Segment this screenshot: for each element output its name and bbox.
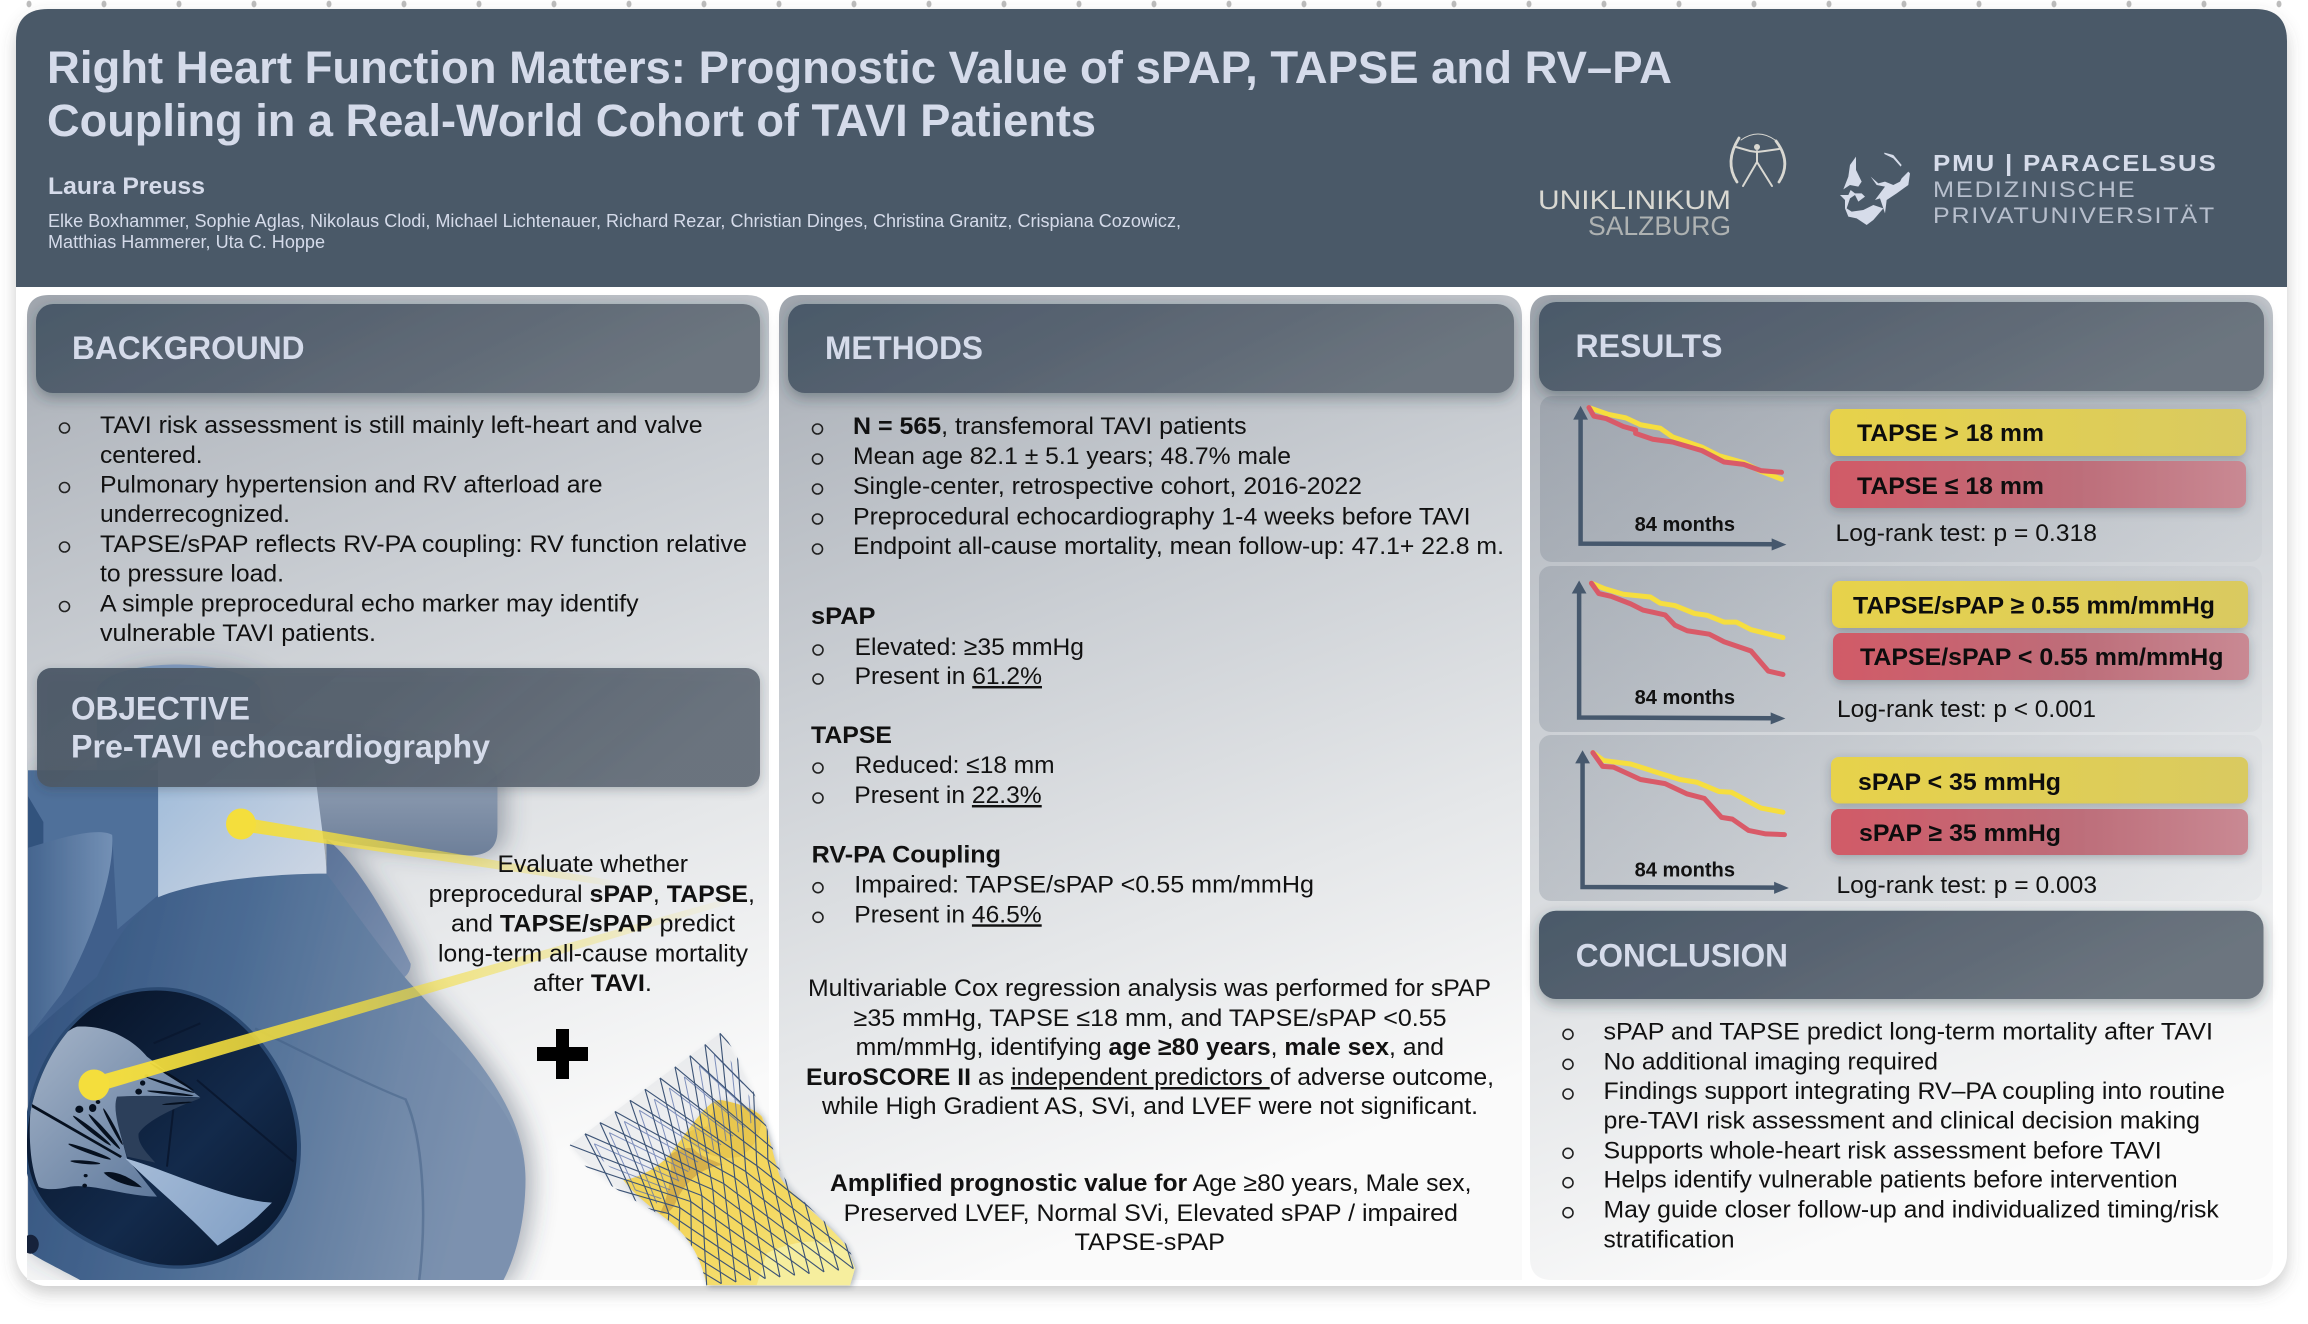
conclusion bullet list: No additional imaging required	[1604, 1048, 1938, 1075]
panel: methods	[779, 295, 1522, 1280]
TAPSE definition	[811, 722, 1055, 809]
legend: sPAP below 35	[1831, 757, 2248, 804]
amplified prognostic value paragraph: Amplified prognostic value for Age ≥80 years, Male sex,	[830, 1170, 1472, 1197]
logo: PMU Paracelsus	[1840, 150, 2218, 228]
panel: results	[1530, 295, 2273, 1280]
axis label: 84 months	[1635, 687, 1735, 709]
background bullet list: to pressure load.	[100, 561, 284, 588]
background bullet list: TAPSE/sPAP reflects RV-PA coupling: RV function relative	[100, 531, 747, 558]
background heading bar: BACKGROUND	[72, 330, 304, 366]
sPAP definition: Elevated: ≥35 mmHg	[855, 634, 1084, 661]
survival chart: TAPSE	[1573, 406, 1786, 550]
legend: TAPSE up to 18	[1830, 461, 2246, 508]
study design list: Preprocedural echocardiography 1-4 weeks before TAVI	[853, 503, 1470, 530]
background bullet list: TAVI risk assessment is still mainly left-heart and valve	[100, 412, 703, 439]
decorative top dots	[0, 0, 2308, 8]
co-authors	[48, 211, 1181, 252]
log-rank result: Log-rank test: p = 0.318	[1836, 520, 2097, 547]
objective heading bar: Pre-TAVI echocardiography	[71, 728, 490, 764]
log-rank result: Log-rank test: p < 0.001	[1837, 696, 2096, 723]
logo: PMU Paracelsus: MEDIZINISCHE	[1933, 177, 2136, 202]
conclusion bullet list	[1563, 1018, 2225, 1254]
TAPSE definition: Present in 22.3%	[854, 782, 1042, 809]
objective heading bar: OBJECTIVE	[71, 691, 250, 727]
legend: sPAP 35 or above: sPAP ≥ 35 mmHg	[1859, 820, 2061, 847]
study design list: Mean age 82.1 ± 5.1 years; 48.7% male	[853, 443, 1291, 470]
title: Right Heart Function Matters: Prognostic Value of sPAP, TAPSE and RV–PA	[47, 42, 1672, 93]
legend: ratio below threshold	[1833, 633, 2249, 680]
heart valve opening	[24, 987, 301, 1269]
background heading bar	[36, 304, 760, 393]
logo: Uniklinikum Salzburg	[1538, 134, 1785, 241]
pointer line to pulmonary artery	[241, 817, 610, 886]
title: Coupling in a Real-World Cohort of TAVI Patients	[47, 95, 1096, 146]
background bullet list: underrecognized.	[100, 501, 290, 528]
methods heading bar	[788, 304, 1514, 393]
RV-PA coupling definition	[812, 842, 1314, 928]
legend: TAPSE above 18: TAPSE > 18 mm	[1857, 420, 2044, 447]
logo: Uniklinikum Salzburg: SALZBURG	[1588, 211, 1731, 241]
amplified prognostic value paragraph: TAPSE-sPAP	[1074, 1229, 1225, 1256]
axis label: 84 months	[1635, 860, 1735, 882]
conclusion bullet list: stratification	[1604, 1227, 1734, 1254]
conclusion bullet list: Supports whole-heart risk assessment before TAVI	[1604, 1137, 2162, 1164]
legend: sPAP 35 or above	[1831, 809, 2248, 855]
conclusion bullet list: pre-TAVI risk assessment and clinical decision making	[1604, 1107, 2200, 1134]
conclusion bullet list: May guide closer follow-up and individualized timing/risk	[1604, 1197, 2220, 1224]
TAPSE definition: Reduced: ≤18 mm	[855, 752, 1055, 779]
objective heading bar	[37, 668, 760, 787]
results heading bar: RESULTS	[1576, 328, 1722, 364]
Cox regression paragraph: EuroSCORE II as independent predictors of adverse outcome,	[806, 1064, 1494, 1091]
amplified prognostic value paragraph: Preserved LVEF, Normal SVi, Elevated sPAP / impaired	[844, 1200, 1458, 1227]
marker: pulmonary artery	[226, 808, 256, 840]
results heading bar	[1539, 302, 2264, 391]
sPAP definition: Present in 61.2%	[855, 663, 1042, 690]
Cox regression paragraph: mm/mmHg, identifying age ≥80 years, male sex, and	[856, 1034, 1444, 1061]
background bullet list: Pulmonary hypertension and RV afterload are	[100, 472, 603, 499]
conclusion heading bar: CONCLUSION	[1576, 938, 1788, 974]
study design list	[812, 413, 1504, 560]
methods heading bar: METHODS	[825, 330, 983, 366]
survival chart: TAPSE/sPAP	[1572, 580, 1785, 724]
legend: sPAP below 35: sPAP < 35 mmHg	[1858, 769, 2061, 796]
sPAP definition	[811, 603, 1084, 690]
RV-PA coupling definition: RV-PA Coupling	[812, 842, 1001, 869]
legend: ratio above threshold: TAPSE/sPAP ≥ 0.55 mm/mmHg	[1853, 592, 2215, 620]
objective statement: long-term all-cause mortality	[438, 941, 749, 968]
presenting author: Laura Preuss	[48, 173, 205, 200]
background bullet list	[60, 412, 747, 647]
pointer line to valve	[94, 899, 725, 1093]
objective statement: preprocedural sPAP, TAPSE,	[429, 881, 755, 908]
Cox regression paragraph: while High Gradient AS, SVi, and LVEF were not significant.	[821, 1093, 1478, 1120]
title	[47, 42, 1672, 146]
co-authors: Elke Boxhammer, Sophie Aglas, Nikolaus Clodi, Michael Lichtenauer, Richard Rezar, Christian Dinges, Christina Granitz, Crispiana Cozowicz,	[48, 211, 1181, 231]
objective statement	[429, 851, 755, 997]
panel: background and objective	[22, 295, 769, 1286]
Cox regression paragraph: Multivariable Cox regression analysis was performed for sPAP	[808, 975, 1491, 1002]
study design list: N = 565, transfemoral TAVI patients	[853, 413, 1247, 440]
result row: TAPSE	[1540, 396, 2262, 562]
objective statement: Evaluate whether	[498, 851, 688, 878]
co-authors: Matthias Hammerer, Uta C. Hoppe	[48, 232, 325, 252]
axis label: 84 months	[1635, 514, 1735, 536]
study design list: Single-center, retrospective cohort, 2016-2022	[853, 473, 1362, 500]
logo: PMU Paracelsus: PMU | PARACELSUS	[1933, 150, 2218, 176]
amplified prognostic value paragraph	[830, 1170, 1472, 1256]
header band	[16, 9, 2287, 287]
legend: ratio below threshold: TAPSE/sPAP < 0.55 mm/mmHg	[1860, 644, 2224, 671]
TAPSE definition: TAPSE	[811, 722, 892, 749]
Cox regression paragraph: ≥35 mmHg, TAPSE ≤18 mm, and TAPSE/sPAP <0.55	[854, 1005, 1447, 1032]
heart illustration	[22, 665, 725, 1286]
sPAP definition: sPAP	[811, 603, 876, 630]
background bullet list: A simple preprocedural echo marker may identify	[100, 591, 639, 618]
RV-PA coupling definition: Present in 46.5%	[854, 901, 1042, 928]
legend: TAPSE above 18	[1830, 409, 2246, 456]
conclusion heading bar	[1539, 911, 2264, 999]
study design list: Endpoint all-cause mortality, mean follow-up: 47.1+ 22.8 m.	[853, 533, 1504, 560]
logo: Uniklinikum Salzburg: UNIKLINIKUM	[1538, 185, 1731, 215]
survival chart: sPAP	[1575, 750, 1789, 894]
logo: PMU Paracelsus: PRIVATUNIVERSITÄT	[1933, 203, 2216, 228]
objective statement: after TAVI.	[533, 970, 652, 997]
conclusion bullet list: sPAP and TAPSE predict long-term mortality after TAVI	[1604, 1018, 2213, 1045]
result row: sPAP	[1539, 735, 2262, 901]
objective statement: and TAPSE/sPAP predict	[451, 911, 735, 938]
background bullet list: vulnerable TAVI patients.	[100, 620, 376, 647]
conclusion bullet list: Helps identify vulnerable patients before intervention	[1604, 1167, 2178, 1194]
conclusion bullet list: Findings support integrating RV–PA coupling into routine	[1604, 1078, 2225, 1105]
Cox regression paragraph	[806, 975, 1494, 1120]
background bullet list: centered.	[100, 442, 203, 469]
result row: TAPSE/sPAP	[1539, 566, 2262, 732]
plus sign	[537, 1029, 588, 1079]
TAVI stent illustration	[570, 1033, 860, 1290]
marker: valve	[78, 1070, 110, 1100]
legend: ratio above threshold	[1832, 581, 2248, 628]
RV-PA coupling definition: Impaired: TAPSE/sPAP <0.55 mm/mmHg	[854, 872, 1314, 899]
legend: TAPSE up to 18: TAPSE ≤ 18 mm	[1857, 473, 2044, 500]
log-rank result: Log-rank test: p = 0.003	[1836, 872, 2097, 899]
